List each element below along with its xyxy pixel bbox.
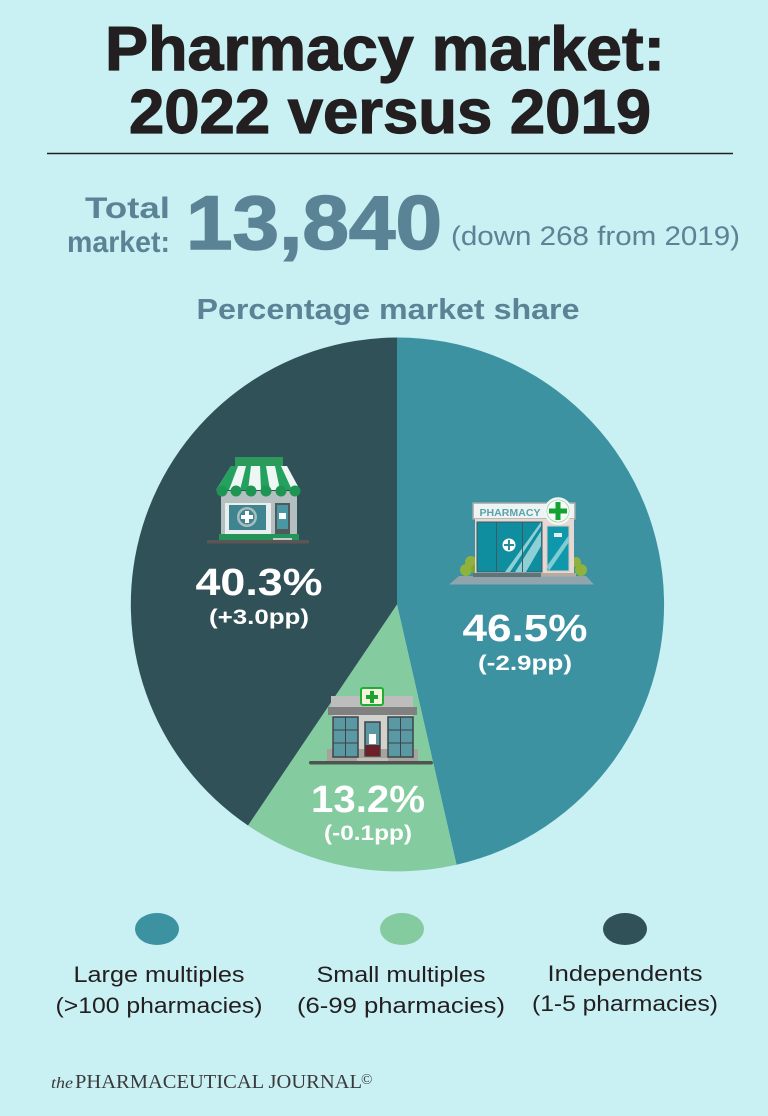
legend: independents: (1-5 pharmacies) <box>532 991 718 1016</box>
label: independents value <box>196 562 322 629</box>
slice: independents <box>131 338 397 826</box>
total market number: 13,840 <box>186 181 442 266</box>
pie chart <box>131 338 664 871</box>
icon: independent pharmacy shop <box>207 457 309 544</box>
publisher logo: © <box>361 1072 372 1088</box>
icon: small multiple pharmacy <box>309 688 433 764</box>
label: independents value: (+3.0pp) <box>209 606 309 629</box>
legend: independents <box>532 913 718 1016</box>
label: independents value: 40.3% <box>196 562 322 604</box>
legend: small multiples: Small multiples <box>316 962 486 987</box>
icon: large pharmacy store: PHARMACY <box>480 507 540 519</box>
legend: large multiples: (>100 pharmacies) <box>56 993 262 1018</box>
total market label <box>67 192 170 259</box>
chart heading: Percentage market share <box>196 294 580 326</box>
title <box>105 15 665 147</box>
change from 2019: (down 268 from 2019) <box>451 221 740 251</box>
label: small multiples value <box>311 779 425 845</box>
label: large multiples value: (-2.9pp) <box>478 652 572 675</box>
title: 2022 versus 2019 <box>129 78 651 147</box>
total market label: Total <box>85 192 170 225</box>
legend <box>56 913 718 1018</box>
publisher logo: the <box>51 1075 73 1092</box>
legend: small multiples <box>297 913 505 1018</box>
legend: independents: Independents <box>548 961 702 986</box>
icon: large pharmacy store <box>449 498 594 584</box>
label: large multiples value: 46.5% <box>462 608 588 650</box>
publisher logo: PHARMACEUTICAL JOURNAL <box>75 1071 362 1093</box>
slice: large multiples <box>397 338 664 865</box>
label: small multiples value: (-0.1pp) <box>324 822 412 845</box>
legend: large multiples <box>56 913 262 1018</box>
label: small multiples value: 13.2% <box>311 779 425 821</box>
slice: small multiples <box>248 604 456 871</box>
total market label: market: <box>67 226 170 259</box>
label: large multiples value <box>462 608 588 675</box>
total market figure <box>67 181 740 266</box>
legend: small multiples: (6-99 pharmacies) <box>297 993 505 1018</box>
title: Pharmacy market: <box>105 15 665 84</box>
legend: large multiples: Large multiples <box>74 962 244 987</box>
